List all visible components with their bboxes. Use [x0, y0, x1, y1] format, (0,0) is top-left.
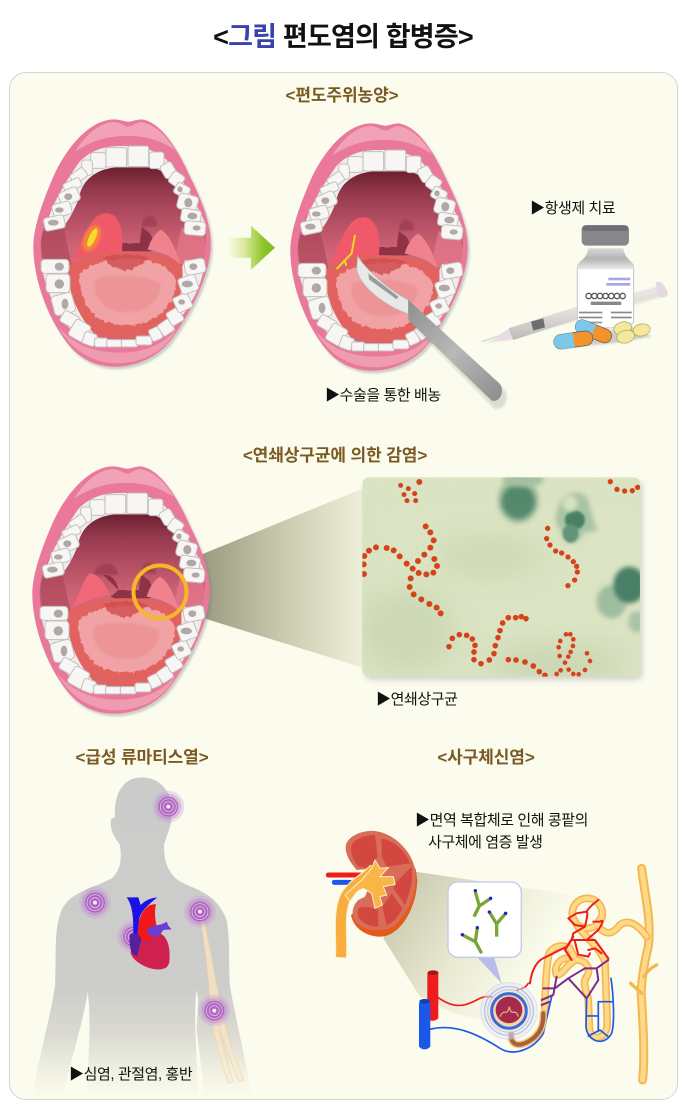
- blood vessels: [419, 970, 438, 1049]
- figure: body silhouette with heart: [33, 777, 252, 1098]
- label: carditis, arthritis, rash: ▶심염, 관절염, 홍반: [69, 1065, 193, 1083]
- icon: kidney: [328, 831, 417, 957]
- icon: arm bones: [199, 913, 244, 1083]
- callout: immune complexes: [448, 882, 521, 957]
- glomerulus: [481, 983, 537, 1039]
- heading: streptococcal infection: <연쇄상구균에 의한 감염>: [243, 446, 427, 465]
- label: immune complex glomerular inflammation: ▶면역 복합체로 인해 콩팥의: [415, 812, 588, 829]
- renal vessels to glomerulus: [430, 983, 552, 1052]
- icon: scalpel: [357, 256, 507, 409]
- icon: inflammation targets: [79, 791, 230, 1027]
- heading: glomerulonephritis: <사구체신염>: [437, 748, 535, 767]
- nephron tubules and capillaries: [530, 868, 657, 1080]
- icon: vial, syringe and pills: [482, 225, 668, 350]
- zoom wedge: [188, 488, 364, 668]
- title: <그림 편도염의 합병증>: [213, 22, 473, 52]
- highlight ring: [134, 566, 186, 618]
- micrograph: streptococcus chains: [360, 473, 645, 680]
- mouth with drainage incision: [290, 123, 470, 373]
- zoom wedge: kidney to nephron: [383, 872, 630, 1033]
- callout pointer: [477, 957, 502, 983]
- mouth with infected tonsil: [33, 119, 213, 369]
- mouth with highlighted tonsil: [32, 466, 212, 716]
- label: immune complex glomerular inflammation: 사구체에 염증 발생: [428, 834, 543, 851]
- heading: peritonsillar abscess: <편도주위농양>: [286, 86, 399, 105]
- label: antibiotic treatment: ▶항생제 치료: [530, 200, 616, 217]
- label: surgical drainage: ▶수술을 통한 배농: [325, 387, 441, 404]
- arrow: [228, 226, 275, 270]
- heading: acute rheumatic fever: <급성 류마티스열>: [75, 748, 209, 767]
- icon: heart: [127, 897, 172, 969]
- label: streptococcus: ▶연쇄상구균: [376, 691, 458, 708]
- kidney and nephron diagram: [328, 831, 657, 1080]
